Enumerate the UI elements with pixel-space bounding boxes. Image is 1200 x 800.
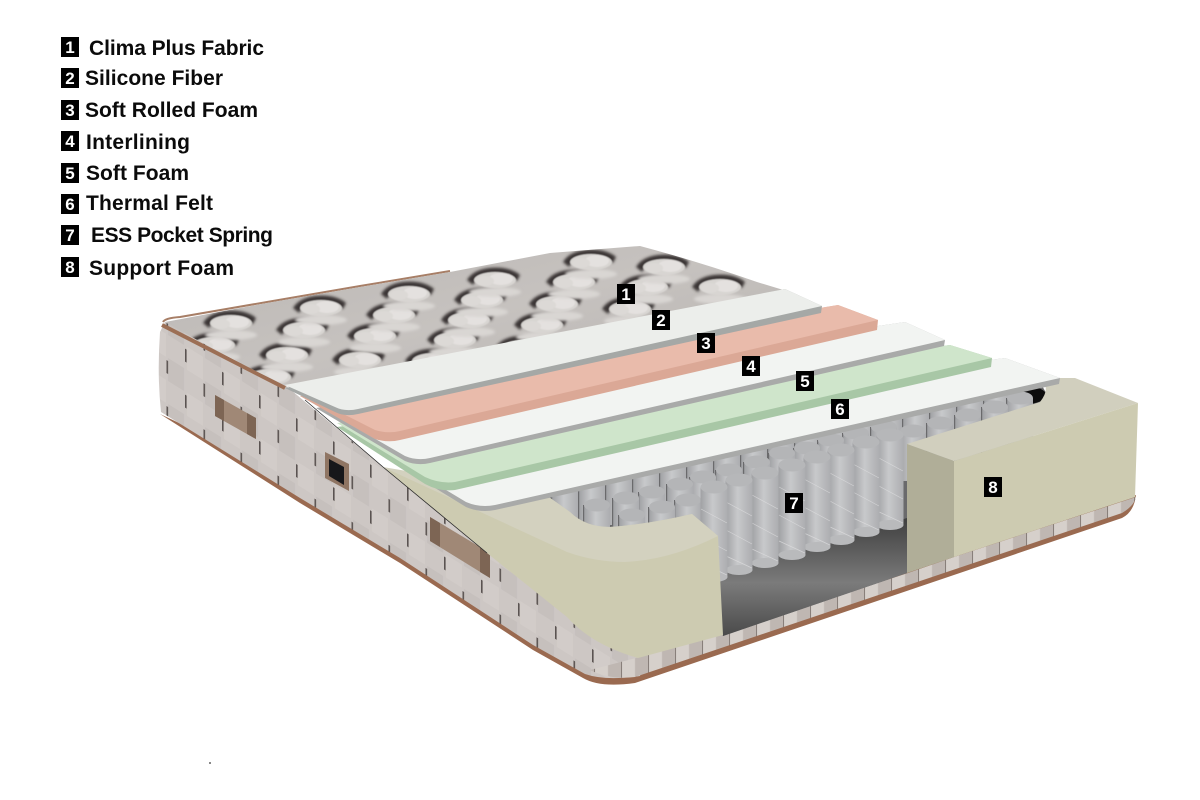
legend item 1: Clima Plus Fabric — [89, 37, 264, 60]
legend item 7: 7 — [65, 226, 75, 245]
legend item 3: Soft Rolled Foam — [85, 99, 258, 122]
top fabric with tufts — [166, 246, 782, 387]
legend item 4: 4 — [65, 132, 75, 151]
tag 3 — [430, 517, 490, 578]
legend — [61, 37, 273, 280]
right support foam block — [907, 378, 1138, 573]
badge 6 — [831, 399, 849, 419]
badge 6: 6 — [835, 400, 845, 419]
legend item 4: Interlining — [86, 131, 190, 154]
legend item 7: ESS Pocket Spring — [91, 224, 273, 247]
tag 1 — [215, 395, 256, 439]
layer 4: interlining — [316, 322, 945, 464]
badge 3: 3 — [701, 334, 711, 353]
badge 4: 4 — [746, 357, 756, 376]
legend item 2: Silicone Fiber — [85, 67, 223, 90]
block top — [907, 378, 1138, 461]
block side — [907, 444, 954, 573]
foam top surface — [383, 467, 718, 562]
legend item 8: 8 — [65, 258, 75, 277]
tag 2 — [325, 452, 349, 491]
block front — [954, 403, 1138, 557]
black gap at far end — [1006, 386, 1046, 404]
badge 8: 8 — [988, 478, 998, 497]
legend item 5: 5 — [65, 164, 75, 183]
layer 2: silicone fiber — [285, 289, 822, 415]
left edge line — [305, 400, 487, 553]
badge 2 — [652, 310, 670, 330]
badge 1: 1 — [621, 285, 631, 304]
stray dot — [209, 762, 211, 764]
back spring row — [551, 384, 1010, 537]
legend item 8: Support Foam — [89, 257, 234, 280]
dark floor — [716, 518, 907, 636]
front fabric strip — [590, 497, 1136, 678]
back piping — [163, 271, 450, 322]
side panel: quilted fabric — [159, 322, 650, 678]
tall spring row — [700, 428, 904, 582]
badge 7: 7 — [789, 494, 799, 513]
middle spring row — [583, 392, 1033, 555]
top piping — [162, 325, 285, 388]
legend item 5: Soft Foam — [86, 162, 189, 185]
badge 1 — [617, 284, 635, 304]
badge 8 — [984, 477, 1002, 497]
number badges — [617, 284, 1002, 513]
badge 5: 5 — [800, 372, 810, 391]
legend item 6: 6 — [65, 195, 75, 214]
layer 5: soft foam — [337, 345, 992, 490]
layer 6: thermal felt — [362, 358, 1060, 511]
left support foam — [383, 467, 723, 658]
badge 7 — [785, 493, 803, 513]
pocket springs — [551, 384, 1033, 582]
legend item 1: 1 — [65, 38, 75, 57]
legend item 6: Thermal Felt — [86, 192, 213, 215]
badge 5 — [796, 371, 814, 391]
front short spring row — [618, 494, 701, 565]
badge 3 — [697, 333, 715, 353]
badge 2: 2 — [656, 311, 666, 330]
side tags — [215, 395, 490, 578]
legend item 2: 2 — [65, 69, 75, 88]
badge 4 — [742, 356, 760, 376]
brown base piping — [160, 414, 1136, 685]
layer 3: soft rolled foam — [300, 305, 878, 441]
tag 2 slot — [329, 459, 344, 485]
spring cavity — [545, 382, 1050, 636]
mattress illustration — [150, 230, 1138, 685]
legend item 3: 3 — [65, 101, 75, 120]
